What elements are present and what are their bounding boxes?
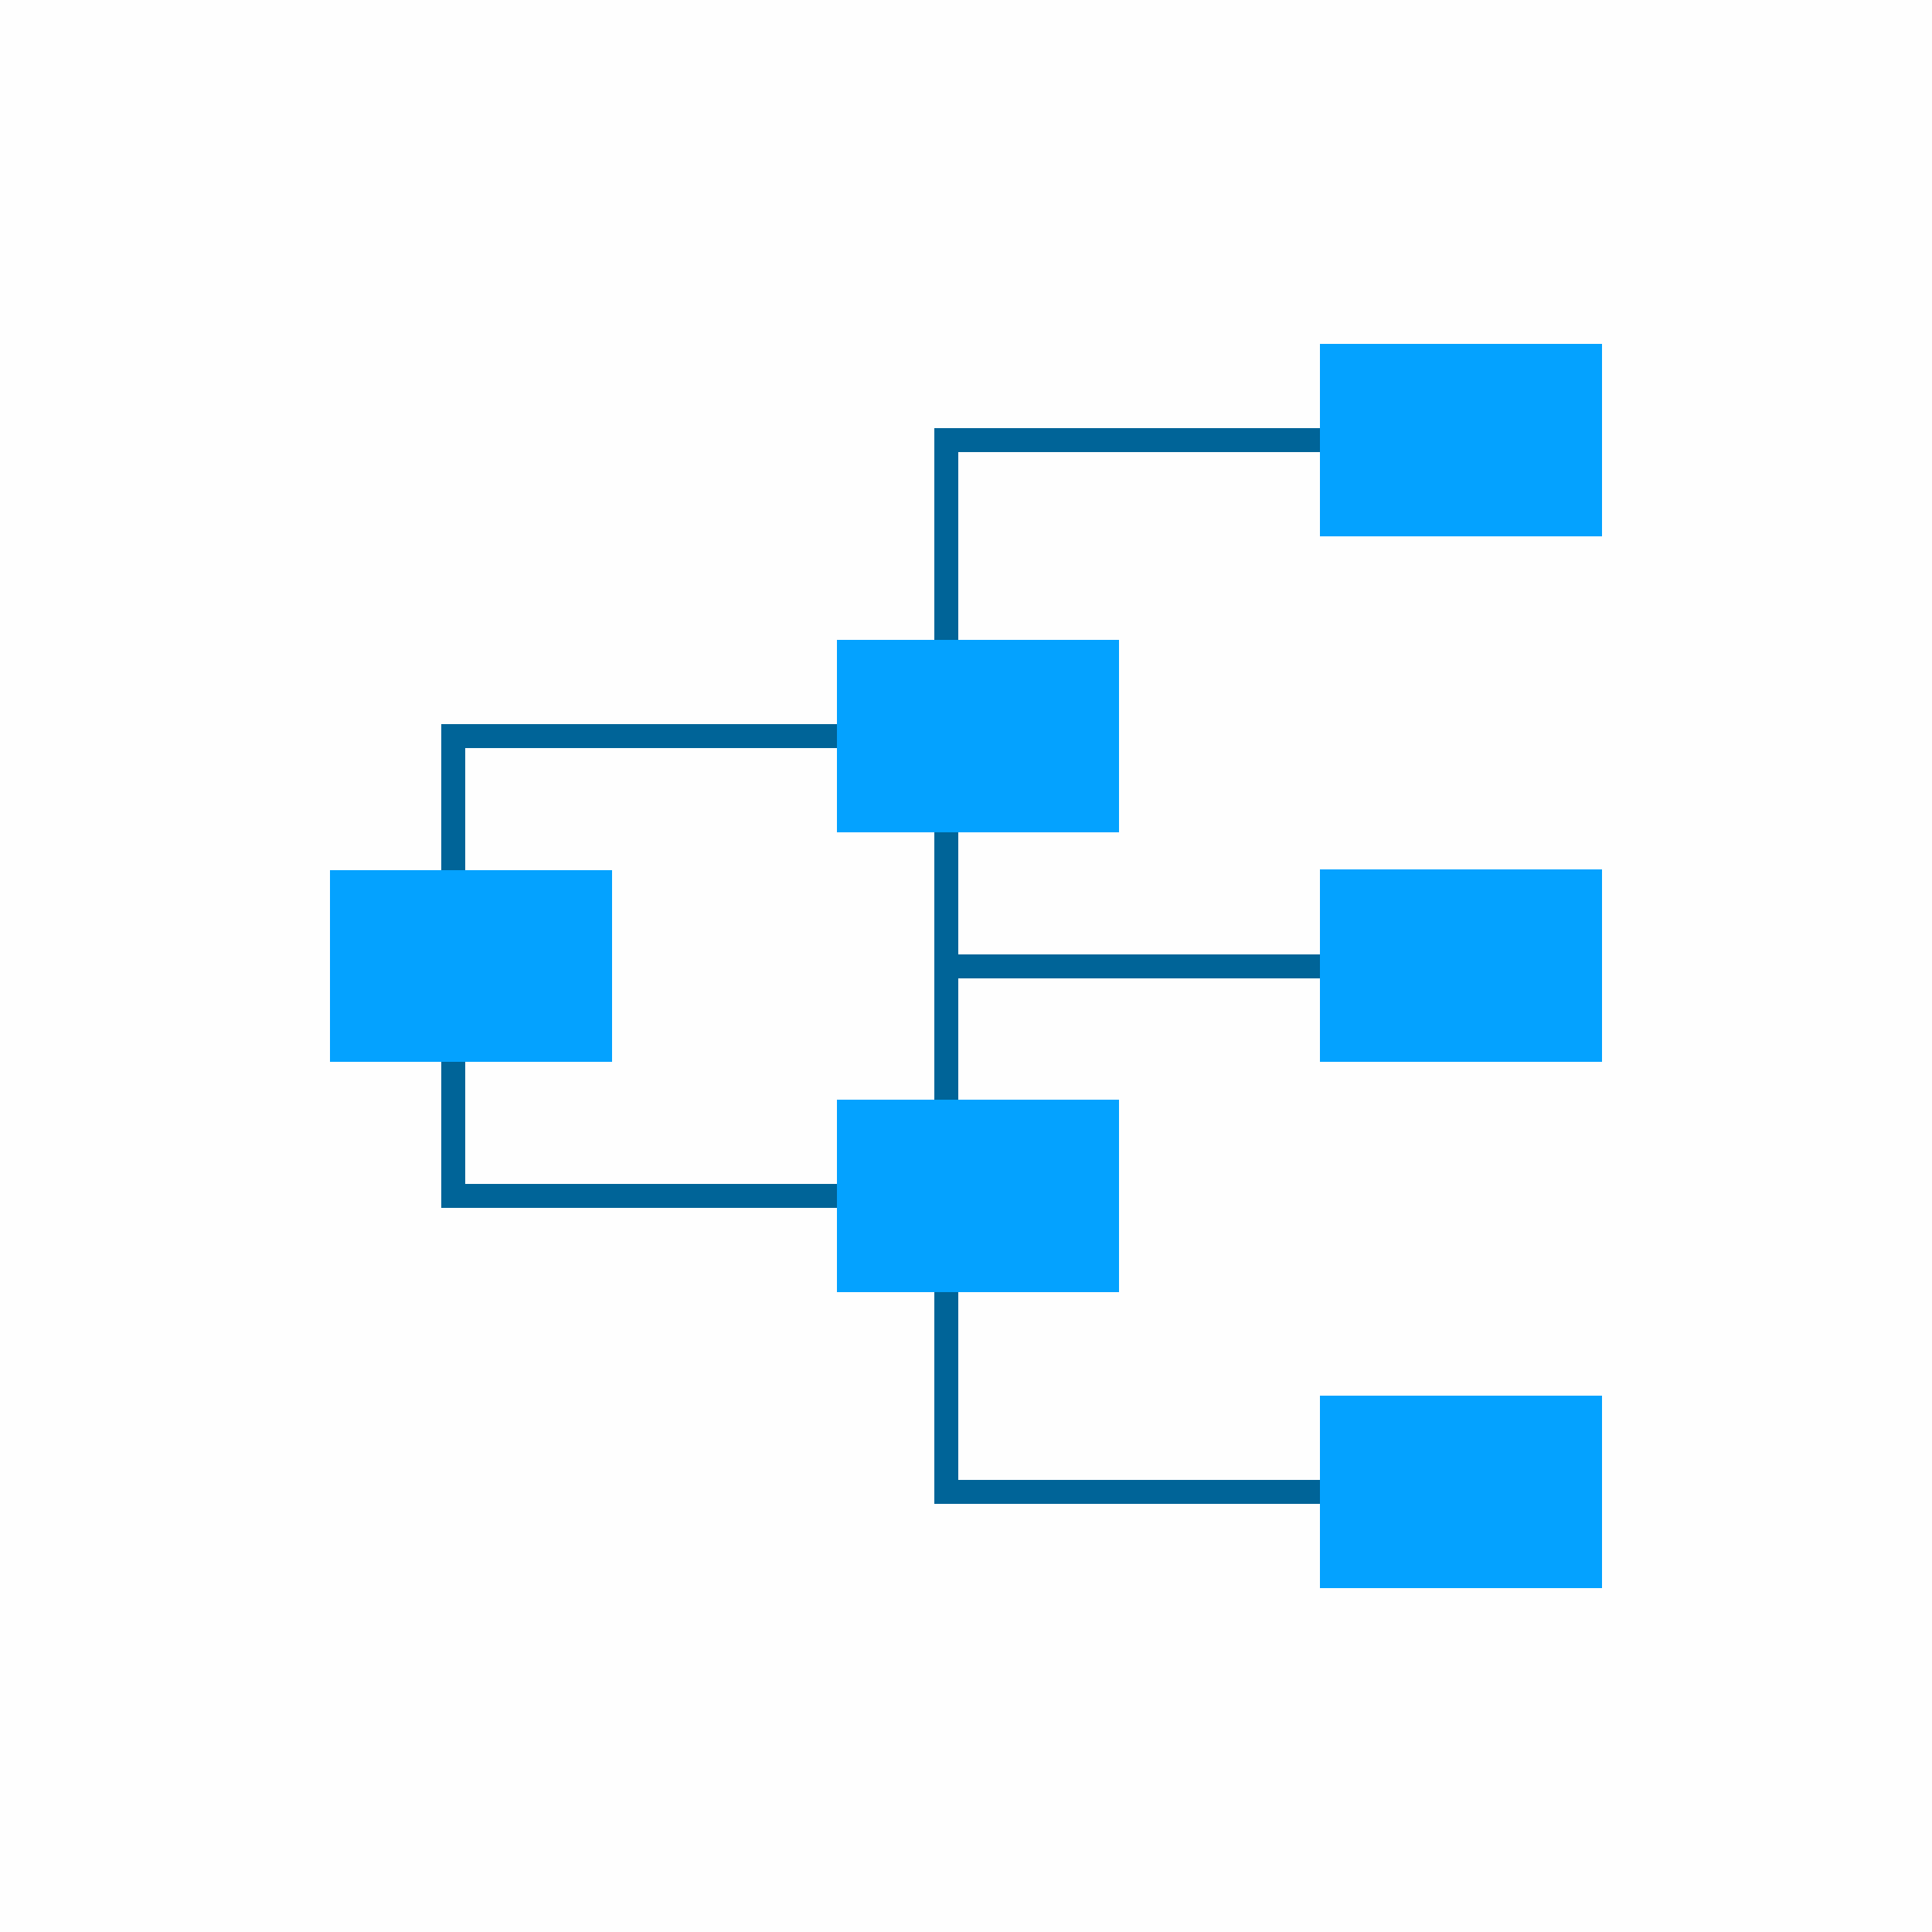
box: top right bbox=[1320, 344, 1602, 536]
box: bottom right bbox=[1320, 1396, 1602, 1588]
boxes bbox=[330, 344, 1602, 1588]
connector: upper middle box to lower middle box and center right box bbox=[934, 832, 1320, 1100]
connector: left box to upper middle box bbox=[441, 724, 837, 870]
connectors bbox=[441, 428, 1320, 1504]
connector: lower middle box to bottom right box bbox=[934, 1292, 1320, 1504]
connector: upper middle box to top right box bbox=[934, 428, 1320, 640]
box: left root bbox=[330, 870, 612, 1062]
box: upper middle bbox=[837, 640, 1119, 832]
connector: left box to lower middle box bbox=[441, 1062, 837, 1208]
box: center right bbox=[1320, 869, 1602, 1062]
box: lower middle bbox=[837, 1100, 1119, 1292]
